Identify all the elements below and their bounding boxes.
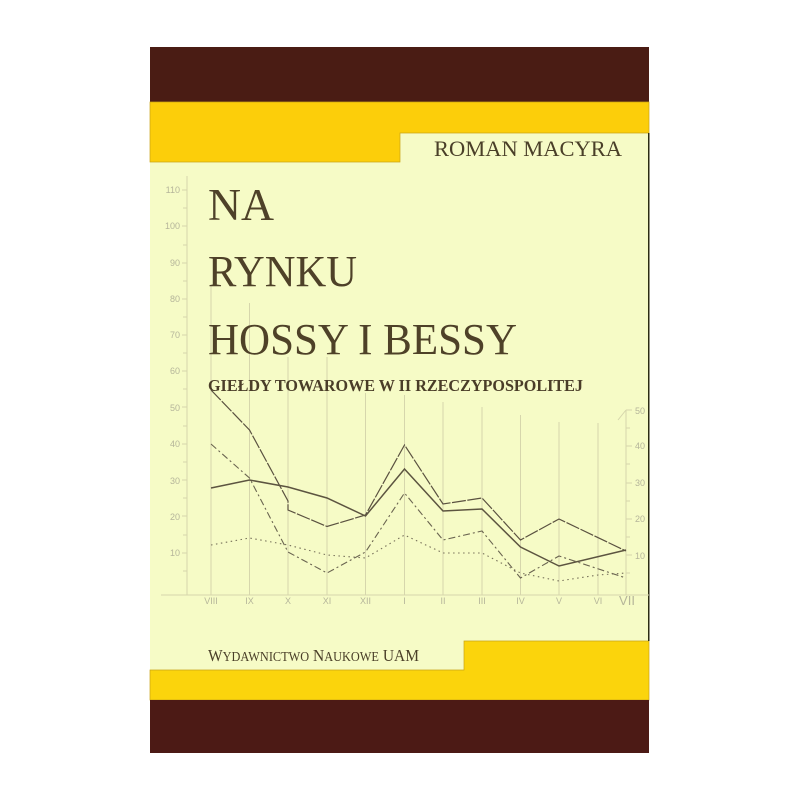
right axis labels: 10: [635, 551, 645, 561]
left axis labels: 70: [170, 330, 180, 340]
right axis labels: 40: [635, 441, 645, 451]
left axis labels: 50: [170, 403, 180, 413]
bottom brown band: [150, 700, 649, 753]
right axis labels: 50: [635, 406, 645, 416]
left axis labels: 20: [170, 512, 180, 522]
series: long-dash line: [211, 390, 626, 551]
left axis labels: 110: [166, 185, 180, 195]
month labels: V: [556, 596, 562, 606]
chart gridlines and axes: [161, 176, 649, 595]
right axis labels: [635, 406, 645, 561]
month labels: III: [478, 596, 486, 606]
right cover edge: [648, 133, 650, 641]
top yellow stepped band: [150, 102, 649, 162]
month labels: II: [440, 596, 446, 606]
right axis labels: 20: [635, 514, 645, 524]
publisher: WYDAWNICTWO NAUKOWE UAM: [208, 646, 419, 665]
left axis labels: 10: [170, 548, 180, 558]
month labels: XII: [360, 596, 371, 606]
title line: RYNKU: RYNKU: [208, 247, 357, 296]
month labels: VI: [594, 596, 602, 606]
month labels: IX: [245, 596, 254, 606]
line chart: [161, 176, 649, 608]
series: dash-dot line: [211, 444, 626, 578]
month labels: [204, 593, 635, 608]
author name: ROMAN MACYRA: [434, 136, 622, 161]
month labels: I: [403, 596, 406, 606]
left axis labels: 60: [170, 366, 180, 376]
subtitle: GIEŁDY TOWAROWE W II RZECZYPOSPOLITEJ: [208, 376, 583, 395]
right axis labels: 30: [635, 478, 645, 488]
left axis labels: 30: [170, 476, 180, 486]
left axis labels: [165, 185, 180, 558]
month labels: XI: [323, 596, 331, 606]
month labels: IV: [516, 596, 525, 606]
cover background panel: [150, 47, 649, 753]
left axis labels: 80: [170, 294, 180, 304]
left axis labels: 100: [165, 221, 180, 231]
series: solid line: [211, 469, 626, 566]
series: dotted line: [211, 535, 626, 581]
month labels: VII: [619, 593, 635, 608]
left axis labels: 40: [170, 439, 180, 449]
title: [208, 180, 517, 364]
bottom yellow stepped band: [150, 641, 649, 700]
left axis labels: 90: [170, 258, 180, 268]
month labels: VIII: [204, 596, 218, 606]
top brown band: [150, 47, 649, 102]
title line: NA: NA: [208, 180, 275, 230]
month labels: X: [285, 596, 291, 606]
title line: HOSSY I BESSY: HOSSY I BESSY: [208, 315, 517, 364]
